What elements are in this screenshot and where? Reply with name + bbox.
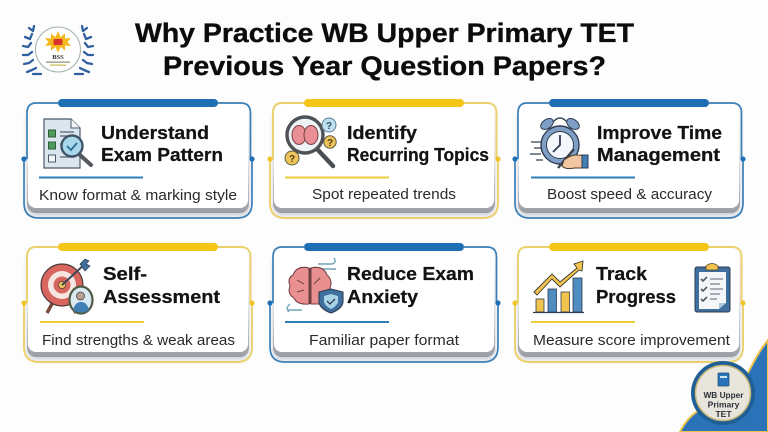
heading: Identify bbox=[347, 122, 418, 143]
corner swoosh bbox=[680, 340, 768, 432]
logo: BSS emblem bbox=[23, 26, 93, 74]
heading: Reduce Exam bbox=[347, 263, 474, 284]
subtext: Know format & marking style bbox=[39, 187, 237, 204]
heading: Assessment bbox=[103, 286, 220, 307]
title: Previous Year Question Papers? bbox=[163, 51, 606, 81]
badge: WB Upper Primary TET: TET bbox=[715, 409, 732, 419]
heading bbox=[101, 122, 223, 165]
icon: brain under magnifier with question marks: ? bbox=[327, 138, 333, 149]
panel: understand exam pattern bbox=[21, 99, 255, 218]
icon: alarm clock with writing hand bbox=[530, 116, 588, 169]
icon: clipboard checklist bbox=[695, 264, 730, 312]
panel: improve time management bbox=[512, 99, 746, 218]
badge: WB Upper Primary TET bbox=[691, 361, 755, 425]
panel: track progress bbox=[512, 243, 746, 362]
icon: checklist and magnifier bbox=[44, 119, 91, 168]
icon: brain with shield bbox=[287, 258, 343, 313]
heading: Progress bbox=[596, 286, 676, 307]
heading: Management bbox=[597, 144, 720, 165]
badge: WB Upper Primary TET: Primary bbox=[708, 400, 740, 410]
title: Why Practice WB Upper Primary TET bbox=[135, 18, 635, 48]
subtext: Familiar paper format bbox=[309, 332, 460, 349]
heading bbox=[597, 122, 722, 165]
panel: identify recurring topics bbox=[267, 99, 501, 218]
subtext: Boost speed & accuracy bbox=[547, 186, 712, 203]
panel: reduce exam anxiety bbox=[267, 243, 501, 362]
title bbox=[135, 18, 635, 81]
heading: Exam Pattern bbox=[101, 144, 223, 165]
badge: WB Upper Primary TET: WB Upper bbox=[704, 390, 744, 400]
icon: book bbox=[718, 373, 729, 386]
panel: self-assessment bbox=[21, 243, 255, 362]
icon: target with arrow and portrait bbox=[41, 259, 92, 314]
icon: bar chart with rising arrow bbox=[533, 261, 584, 312]
heading bbox=[103, 263, 220, 307]
icon: brain under magnifier with question marks bbox=[285, 117, 336, 166]
icon: brain under magnifier with question marks: ? bbox=[326, 121, 332, 132]
subtext: Measure score improvement bbox=[533, 332, 731, 349]
logo: BSS emblem: BSS bbox=[52, 54, 64, 61]
heading: Improve Time bbox=[597, 122, 722, 143]
heading: Self- bbox=[103, 263, 147, 284]
icon: brain under magnifier with question marks: ? bbox=[289, 154, 295, 165]
heading: Understand bbox=[101, 122, 209, 143]
heading: Track bbox=[596, 263, 648, 284]
heading: Recurring Topics bbox=[347, 144, 489, 165]
heading bbox=[596, 263, 676, 307]
heading bbox=[347, 263, 474, 307]
subtext: Find strengths & weak areas bbox=[42, 332, 235, 349]
subtext: Spot repeated trends bbox=[312, 186, 456, 203]
heading: Anxiety bbox=[347, 286, 419, 307]
heading bbox=[347, 122, 489, 165]
